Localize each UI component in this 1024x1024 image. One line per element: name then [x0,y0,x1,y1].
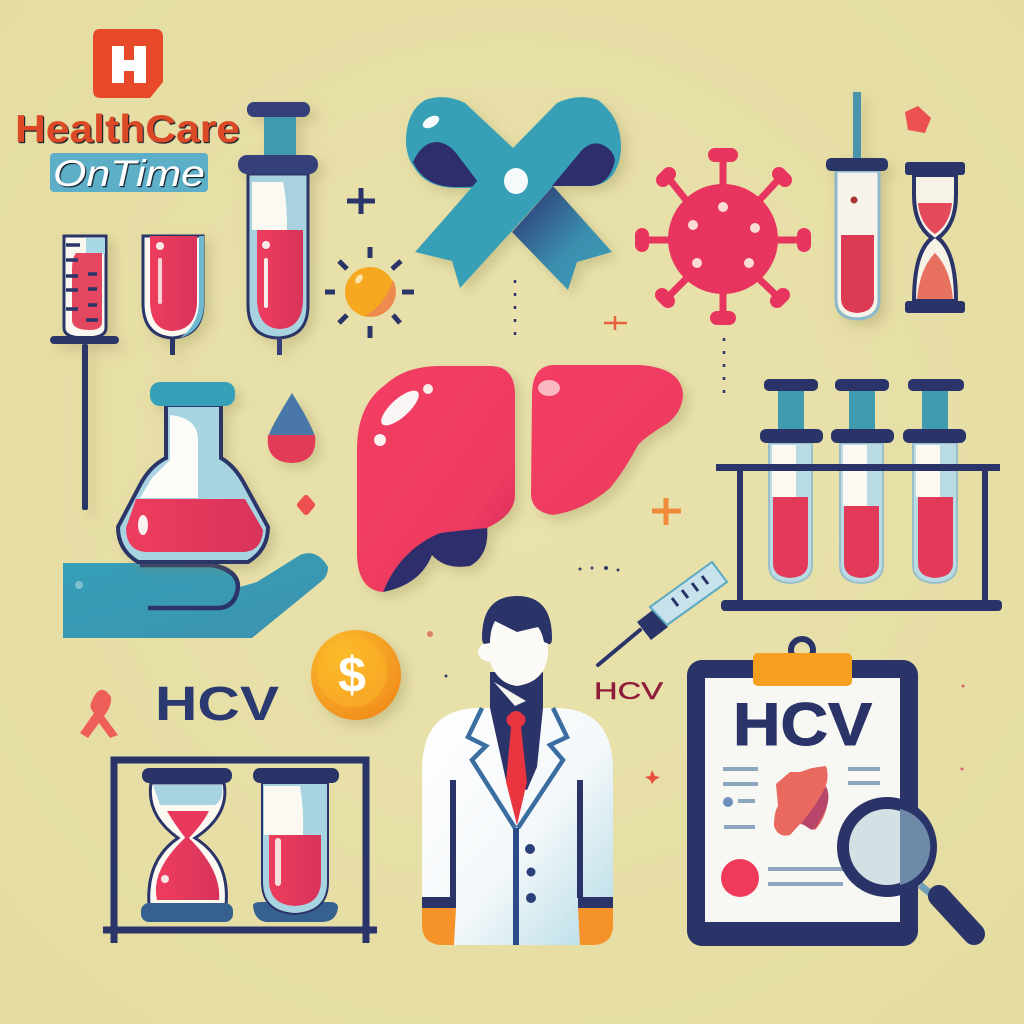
icon: coin [311,630,401,720]
clipboard red dot [721,859,759,897]
icon: sun [325,247,414,338]
small scattered dots [427,566,964,770]
clipboard text lines [723,769,880,884]
icon: awareness ribbon [406,97,621,290]
tube 3 [903,379,966,583]
icon: left syringe [50,236,119,510]
decorative red blot top right [905,106,931,133]
icon: magnifying glass [843,803,974,934]
icon: blood droplet [268,393,315,463]
doctor head [478,620,548,686]
tube 2 [831,379,894,583]
doctor cuffs [422,897,613,908]
icon: virus [642,155,804,318]
doctor collar [494,682,526,706]
virus body [668,184,778,294]
doctor buttons [525,844,536,903]
clipboard clip [753,639,852,686]
icon: small ribbon [80,690,118,738]
small plus red [604,316,627,330]
icon: left test tube [143,236,204,355]
icon: test tube rack [716,379,1002,611]
ribbon left loop [406,97,513,188]
small red blot [300,498,312,512]
logo wordmark OnTime: OnTime [53,153,205,194]
ribbon lower right tail [512,186,612,290]
icon: hourglass top right [905,162,965,313]
doctor shirt [490,672,543,790]
test tube [253,768,339,922]
icon: hand [63,553,328,638]
liver left lobe dark underside [383,525,487,592]
icon: coin: $ [338,647,366,703]
dashed connector lines [515,280,724,395]
icon: logo H square [93,29,163,98]
doctor figure [422,596,613,945]
icon: small plus orange [652,498,681,525]
label HCV left: HCV [155,678,279,731]
icon: liver [357,365,683,592]
liver right lobe [531,365,683,515]
icon: plus sign [347,188,375,214]
clipboard board [687,660,918,946]
icon: flask [118,382,268,562]
icon: large syringe tube top centre-left [238,102,318,355]
clipboard [687,639,974,946]
doctor lapels [468,708,567,828]
doctor sleeve lines [453,780,580,898]
logo: HealthCare OnTime [15,29,240,194]
liver left lobe [357,366,515,592]
hourglass [141,768,233,922]
clipboard heading HCV: HCV [733,691,872,758]
logo wordmark HealthCare: HealthCare [15,108,240,151]
clipboard liver image [774,766,828,836]
tube 1 [760,379,823,583]
ribbon right loop and front band [415,97,621,288]
label HCV small: HCV [594,678,663,705]
doctor coat [422,708,613,945]
doctor tie [506,711,527,825]
small red star [645,770,660,784]
icon: angled syringe [598,562,727,665]
icon: right thin syringe tube [826,92,888,319]
icon: hourglass and tube frame [103,760,377,943]
